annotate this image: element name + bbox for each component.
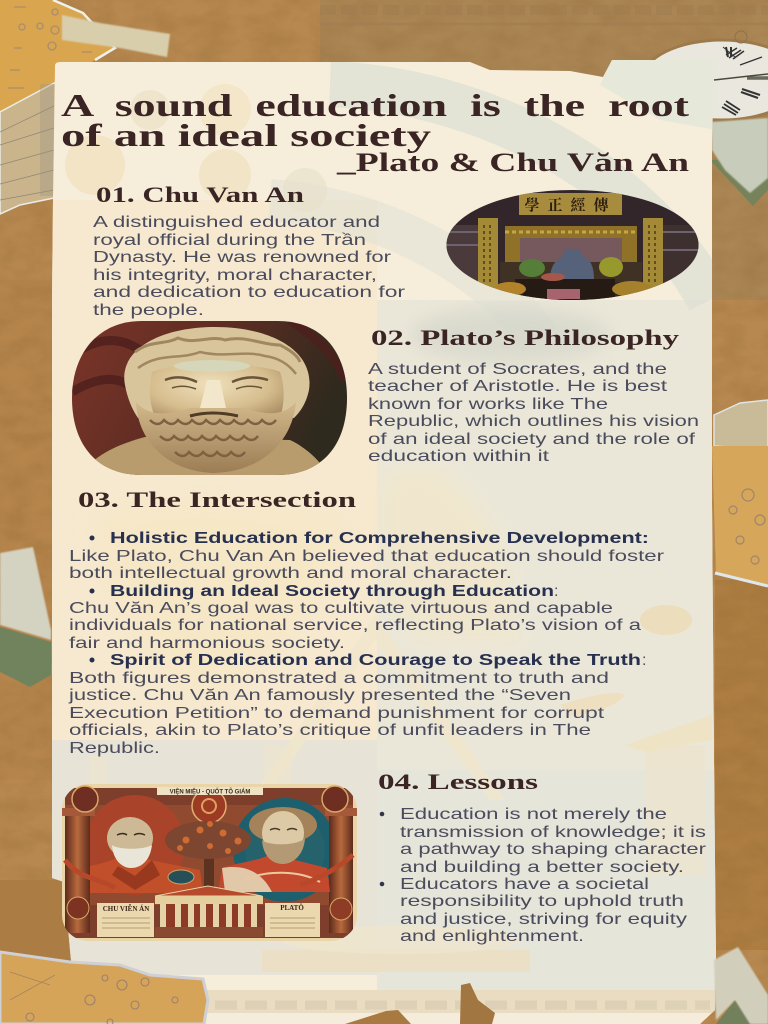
text block: Chu Van An: Dynasty. He was renowned for xyxy=(93,249,392,266)
temple xyxy=(155,886,263,937)
text block: The Intersection: Execution Petition” to demand punishment for corrupt xyxy=(69,705,605,722)
tape and green scrap: left xyxy=(0,547,51,687)
text block: Chu Van An: A distinguished educator and xyxy=(93,214,380,231)
text block: Lessons: Educators have a societal xyxy=(400,876,649,893)
text block: Lessons: and building a better society. xyxy=(400,859,684,876)
lined paper scrap: left xyxy=(0,82,56,214)
text block: The Intersection: Chu Văn An’s goal was to cultivate virtuous and capable xyxy=(69,600,613,617)
right column xyxy=(322,786,357,933)
patterned orange paper: bottom left xyxy=(0,952,208,1024)
text block: The Intersection: fair and harmonious society. xyxy=(69,635,345,652)
caption panel: left xyxy=(97,903,154,937)
text block: Plato: education within it xyxy=(368,448,550,465)
text block: Plato: Republic, which outlines his vision xyxy=(368,413,699,430)
text block: Plato: A student of Socrates, and the xyxy=(368,361,667,378)
text block: Chu Van An: the people. xyxy=(93,302,204,319)
illustration: Chu Van An and Plato xyxy=(60,782,360,944)
text block: Plato: of an ideal society and the role of xyxy=(368,431,696,448)
clock xyxy=(642,31,768,120)
text block: The Intersection: Like Plato, Chu Van An believed that education should foster xyxy=(69,548,665,565)
heading: 03: 03. The Intersection xyxy=(78,487,357,512)
text block: The Intersection: individuals for national service, reflecting Plato’s vision of a xyxy=(69,617,641,634)
text block: The Intersection: Republic. xyxy=(69,740,160,757)
text block: The Intersection: officials, akin to Plato’s critique of unfit leaders in The xyxy=(69,722,591,739)
text block: Chu Van An: royal official during the Trần xyxy=(93,232,366,249)
figure: Chu Van An xyxy=(90,817,203,893)
figure: Plato xyxy=(218,807,330,892)
heading: 04: 04. Lessons xyxy=(378,769,538,794)
faded pattern: top arcs xyxy=(65,60,716,340)
text block: Chu Van An xyxy=(93,214,406,319)
torn brown edge xyxy=(0,880,70,970)
bust beard xyxy=(136,402,296,473)
tree xyxy=(165,821,251,887)
text block: The Intersection: Both figures demonstrated a commitment to truth and xyxy=(69,670,609,687)
illustration top label xyxy=(157,787,263,796)
tape: top left xyxy=(62,15,170,57)
text block: Lessons: and justice, striving for equity xyxy=(400,911,687,928)
text block: The Intersection: Spirit of Dedication and Courage to Speak the Truth xyxy=(110,652,641,669)
text block: Plato: teacher of Aristotle. He is best xyxy=(368,378,668,395)
bust hair xyxy=(124,327,310,418)
title xyxy=(61,87,690,177)
text block: Lessons: responsibility to uphold truth xyxy=(400,893,684,910)
text block: Plato: known for works like The xyxy=(368,396,608,413)
text block: Chu Van An: his integrity, moral character, xyxy=(93,267,377,284)
caption panel: right xyxy=(265,903,320,937)
text block: Chu Van An: and dedication to education for xyxy=(93,284,406,301)
tape and green scrap: top right xyxy=(710,118,768,206)
text block: Lessons: transmission of knowledge; it is xyxy=(400,824,706,841)
bust face xyxy=(150,366,284,414)
text block: Lessons: Education is not merely the xyxy=(400,806,667,823)
image: temple altar photo xyxy=(446,189,700,301)
torn holes: bottom edge xyxy=(345,983,495,1024)
drape ribbons xyxy=(65,855,353,888)
heading: 02: 02. Plato’s Philosophy xyxy=(371,325,680,350)
title: _Plato & Chu Văn An xyxy=(336,148,690,177)
title: of an ideal society xyxy=(61,117,431,153)
text block: Lessons xyxy=(380,806,707,945)
image: Plato bust xyxy=(70,319,350,477)
text block: The Intersection: both intellectual growth and moral character. xyxy=(69,565,512,582)
text block: The Intersection: justice. Chu Văn An famously presented the “Seven xyxy=(68,687,571,704)
patterned scrap: right xyxy=(712,400,768,586)
caption panel: right: PLATÔ xyxy=(280,904,304,912)
text block: Lessons: and enlightenment. xyxy=(400,928,584,945)
faded pattern: temple xyxy=(113,618,716,1013)
image: temple altar photo: 學正經傳 xyxy=(523,196,617,214)
illustration top label: VIỆN MIỆU - QUỐT TÔ GIÁM xyxy=(170,788,250,796)
patterned orange paper: top left xyxy=(0,0,115,112)
caption panel: left: CHU VIỄN ÁN xyxy=(103,905,149,913)
tape: bottom right xyxy=(714,947,768,1024)
text block: The Intersection: Holistic Education for Comprehensive Development: xyxy=(110,530,649,547)
text block: The Intersection xyxy=(68,530,665,757)
text block: Lessons: a pathway to shaping character xyxy=(400,841,707,858)
heading: 01: 01. Chu Van An xyxy=(96,182,304,207)
left column xyxy=(62,786,98,933)
title: A sound education is the root xyxy=(61,87,689,123)
faded pattern: Plato face xyxy=(90,307,692,716)
text block: The Intersection: : xyxy=(642,652,646,669)
text block: The Intersection: : xyxy=(554,583,558,600)
text block: Plato xyxy=(368,361,699,465)
text block: The Intersection: Building an Ideal Society through Education xyxy=(110,583,554,600)
